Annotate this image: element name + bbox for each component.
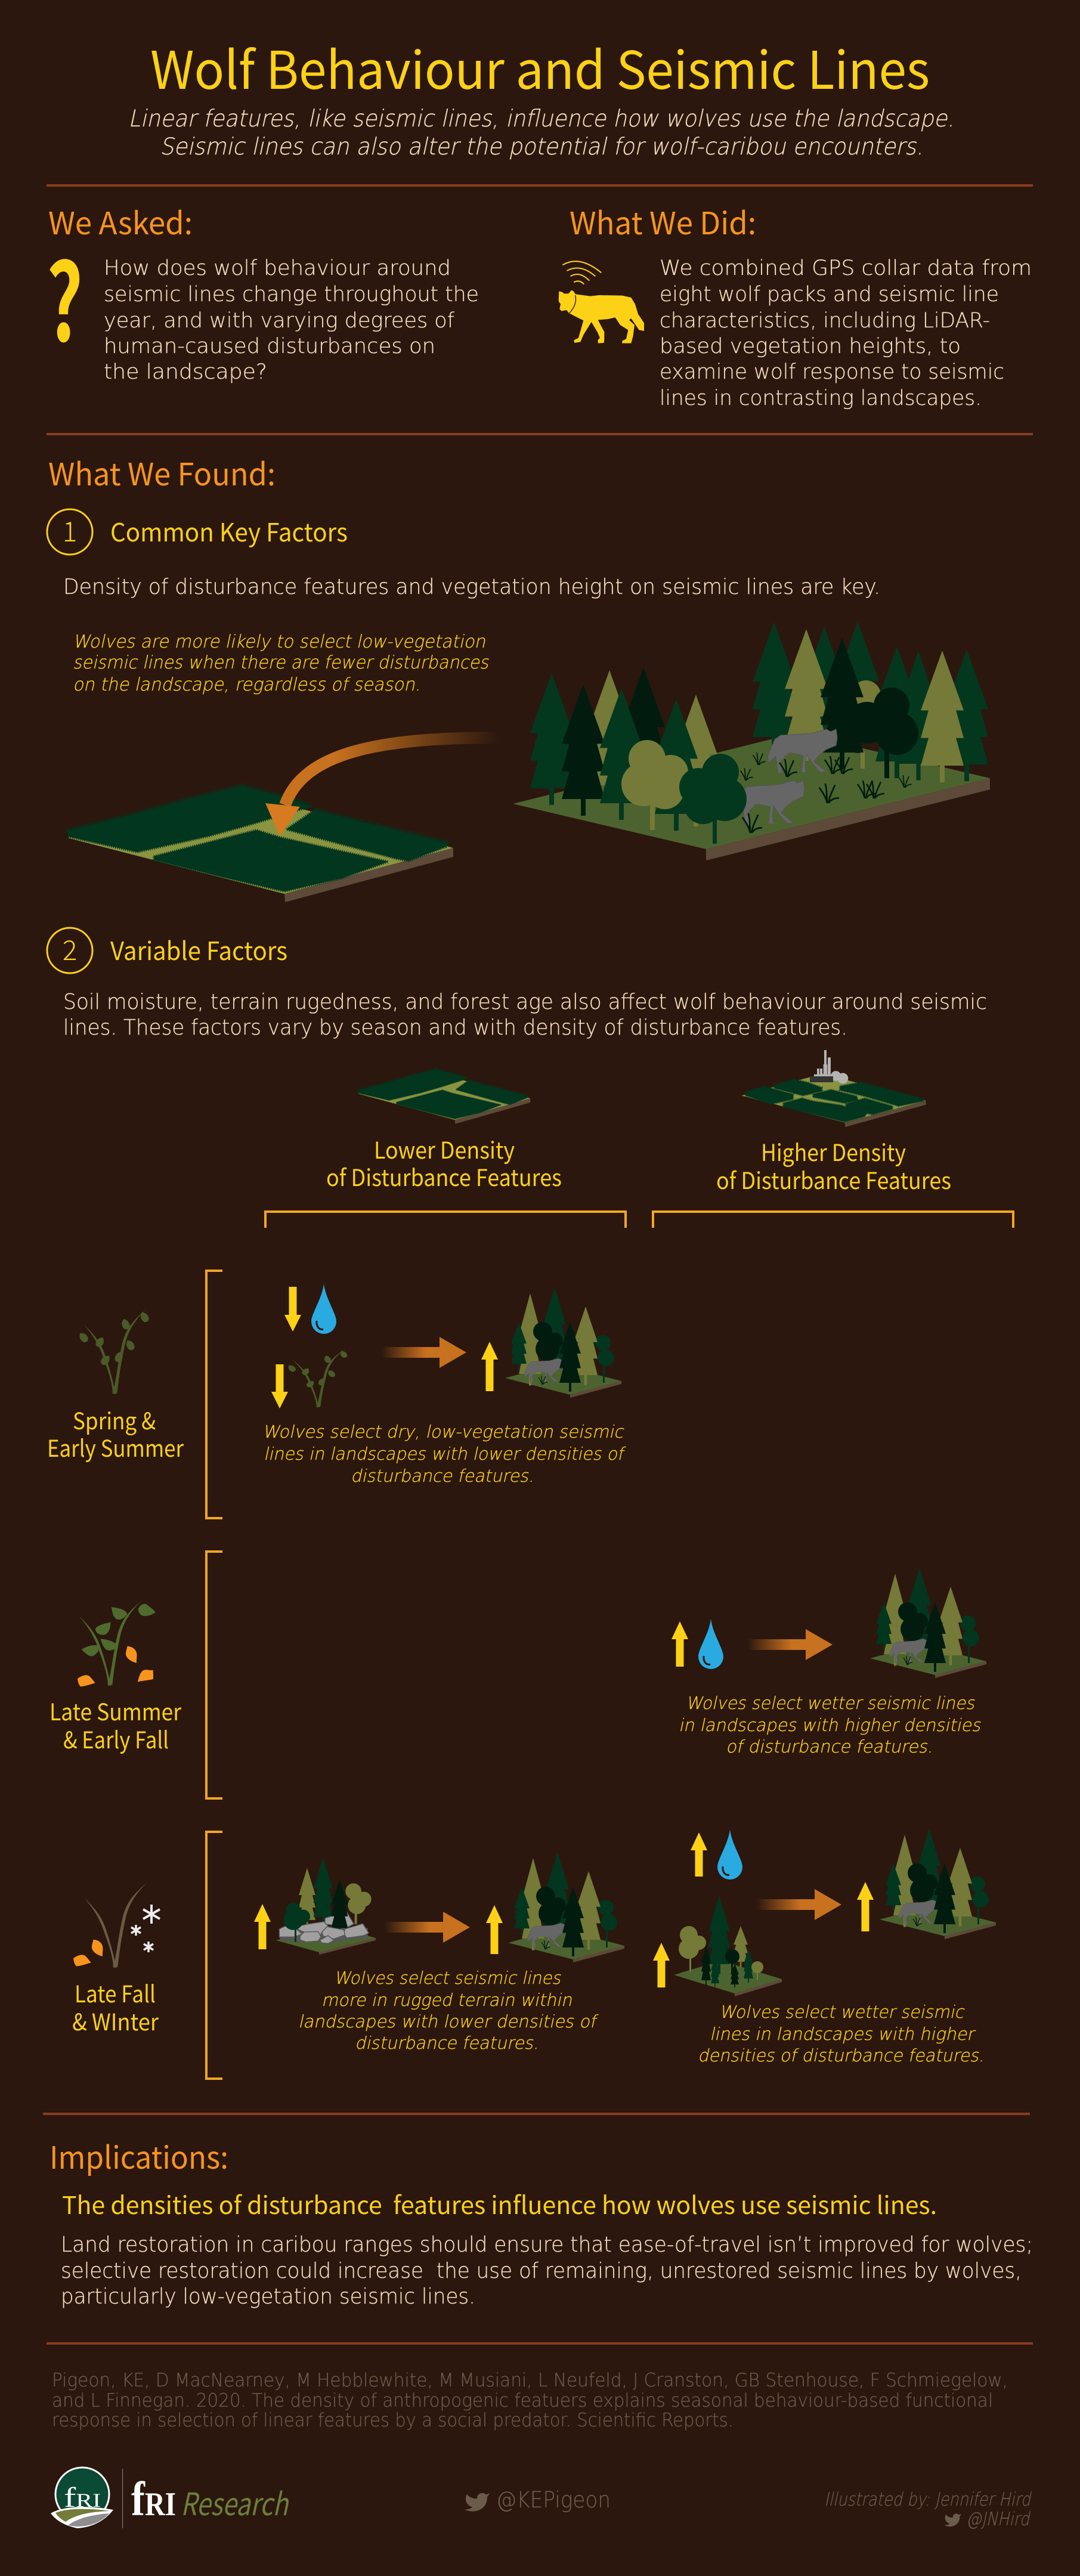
panel: we asked	[47, 199, 479, 384]
text: methods: We combined GPS collar data from	[660, 256, 1032, 280]
callout: low-vegetation selection: Wolves are more likely to select low-vegetation	[72, 631, 489, 652]
text: rugged terrain finding	[298, 1968, 599, 2053]
text: question: human-caused disturbances on	[104, 335, 435, 358]
text: spring finding: Wolves select dry, low-vegetation seismic	[262, 1422, 627, 1442]
icon: water drop	[698, 1619, 723, 1669]
text: rugged terrain finding: more in rugged terrain within	[321, 1990, 575, 2010]
illustration: mini forest	[880, 1829, 996, 1939]
arrow: orange result	[747, 1629, 833, 1660]
label: lower density	[326, 1132, 562, 1193]
subtitle: Linear features, like seismic lines, influence how wolves use the landscape.	[127, 105, 959, 132]
text: rugged terrain finding: disturbance features.	[354, 2033, 542, 2053]
arrow: up, selection	[486, 1905, 503, 1954]
credit: illustrator	[823, 2489, 1034, 2530]
callout: low-vegetation selection	[72, 631, 492, 695]
text: implications body: Land restoration in caribou ranges should ensure that ease-of-travel isn’t improved for wolves;	[61, 2233, 1033, 2257]
number badge 1	[47, 509, 92, 555]
arrow: curved orange	[265, 738, 499, 836]
panel: implications	[49, 2133, 1033, 2309]
arrow: up, young forest	[653, 1943, 670, 1987]
illustration: forest plot with wolves	[513, 621, 990, 860]
illustration: mini forest	[508, 1852, 624, 1962]
text: key statement: Density of disturbance features and vegetation height on seismic lines are key.	[63, 575, 880, 599]
text: spring finding	[262, 1422, 627, 1486]
label: lower density: Lower Density	[374, 1132, 515, 1166]
arrow: orange result	[385, 1912, 470, 1943]
icon: question mark: ?	[47, 219, 83, 372]
text: implications body: selective restoration could increase the use of remaining, unrestored seismic lines by wolves,	[61, 2259, 1022, 2283]
text: wetter lines finding: Wolves select wetter seismic	[719, 2002, 967, 2022]
text: rugged terrain finding: landscapes with lower densities of	[298, 2011, 599, 2032]
arrow: up, ruggedness	[254, 1904, 271, 1949]
text: late summer finding: in landscapes with higher densities	[678, 1715, 984, 1735]
label: late summer and early fall	[49, 1694, 182, 1755]
social: lead author twitter: @KEPigeon	[496, 2487, 611, 2513]
label: late summer and early fall: Late Summer	[49, 1694, 182, 1727]
wolf: back	[768, 729, 837, 773]
callout: low-vegetation selection: on the landscape, regardless of season.	[72, 674, 424, 695]
text: wetter lines finding: lines in landscapes with higher	[709, 2024, 978, 2044]
icon: spring plant	[77, 1308, 150, 1394]
logo: fRI Research	[51, 2467, 296, 2528]
text: implications body: particularly low-vegetation seismic lines.	[61, 2284, 475, 2309]
label: late fall and winter: Late Fall	[75, 1976, 156, 2010]
label: lower density: of Disturbance Features	[326, 1160, 562, 1193]
arrow: up, moisture	[691, 1832, 707, 1877]
heading: common key factors: Common Key Factors	[110, 513, 348, 549]
illustration: mini forest	[505, 1287, 621, 1398]
text: spring finding: lines in landscapes with lower densities of	[263, 1444, 627, 1464]
text: methods: eight wolf packs and seismic line	[660, 283, 999, 306]
text: rugged terrain finding: Wolves select seismic lines	[333, 1968, 564, 1988]
bracket: late fall	[206, 1832, 222, 2079]
text: spring finding: disturbance features.	[350, 1466, 537, 1486]
icon: winter plant with snowflakes	[73, 1881, 160, 1968]
label: late fall and winter: & WInter	[72, 2004, 159, 2038]
logo: fRI Research: fRI	[64, 2482, 101, 2513]
number badge 2	[47, 928, 92, 973]
illustration: mini forest	[870, 1568, 986, 1678]
label: spring and early summer: Early Summer	[47, 1431, 184, 1464]
label: higher density	[716, 1135, 951, 1196]
label: late fall and winter	[72, 1976, 159, 2038]
citation	[52, 2370, 1008, 2431]
icon: water drop	[311, 1284, 336, 1334]
icon: water drop	[717, 1829, 742, 1880]
text: variable factors description: Soil moisture, terrain rugedness, and forest age also affect wolf behaviour around seismic	[63, 990, 987, 1014]
panel: what we did	[559, 199, 1032, 410]
callout: low-vegetation selection: seismic lines when there are fewer disturbances	[72, 652, 492, 673]
text: late summer finding	[678, 1693, 984, 1757]
bracket: higher density column	[653, 1212, 1013, 1228]
text: variable factors description: lines. These factors vary by season and with density of disturbance features.	[63, 1015, 847, 1040]
text: wetter lines finding	[697, 2002, 988, 2066]
title: Wolf Behaviour and Seismic Lines	[150, 29, 930, 104]
bracket: late summer	[206, 1552, 222, 1798]
illustration: rugged terrain plot	[276, 1857, 376, 1955]
heading: what we found: What We Found:	[48, 450, 276, 494]
subtitle	[127, 105, 959, 160]
logo: fRI Research: Research	[179, 2480, 296, 2525]
text: methods	[660, 256, 1032, 410]
arrow: down, moisture	[284, 1287, 301, 1332]
text: methods: characteristics, including LiDAR-	[660, 309, 990, 333]
bracket: spring	[206, 1271, 222, 1518]
arrow: down, vegetation	[271, 1364, 288, 1408]
text: question: year, and with varying degrees of	[104, 309, 455, 333]
text: methods: based vegetation heights, to	[660, 335, 961, 358]
section: common key factors	[47, 509, 990, 902]
heading: what we did: What We Did:	[570, 199, 756, 243]
heading: variable factors: Variable Factors	[110, 931, 287, 968]
illustration: low-vegetation plot	[67, 786, 453, 902]
text: question: the landscape?	[104, 360, 267, 384]
wolf: front	[735, 781, 804, 825]
icon: late summer plant	[78, 1599, 156, 1686]
arrow: up, moisture	[671, 1621, 688, 1667]
row: spring and early summer	[47, 1271, 627, 1518]
arrow: orange result	[756, 1889, 841, 1920]
citation: response in selection of linear features by a social predator. Scientific Reports.	[52, 2410, 734, 2431]
text: methods: lines in contrasting landscapes.	[660, 386, 982, 410]
credit: illustrator: Illustrated by: Jennifer Hird	[823, 2489, 1034, 2510]
logo: fRI Research: fRI	[131, 2472, 176, 2526]
text: methods: examine wolf response to seismic	[660, 360, 1004, 384]
text: implications body	[61, 2233, 1033, 2309]
text: question: seismic lines change throughout the	[104, 283, 479, 306]
label: higher density: Higher Density	[761, 1135, 906, 1168]
citation: Pigeon, KE, D MacNearney, M Hebblewhite, M Musiani, L Neufeld, J Cranston, GB Stenhouse, F Schmiegelow,	[52, 2370, 1008, 2391]
row: late fall and winter	[72, 1829, 996, 2079]
text: question	[104, 256, 479, 384]
heading: we asked: We Asked:	[48, 199, 193, 243]
citation: and L Finnegan. 2020. The density of anthropogenic featuers explains seasonal behaviour-based functional	[52, 2390, 993, 2411]
arrow: orange result	[381, 1337, 466, 1368]
illustration: lower density plot	[358, 1069, 530, 1124]
label: late summer and early fall: & Early Fall	[63, 1722, 169, 1755]
label: spring and early summer	[47, 1403, 184, 1464]
text: late summer finding: of disturbance features.	[725, 1736, 936, 1757]
row: late summer and early fall	[49, 1552, 986, 1798]
arrow: up, selection	[481, 1342, 498, 1391]
number badge 1: 1	[63, 510, 77, 550]
text: variable factors description	[63, 990, 987, 1040]
bracket: lower density column	[265, 1212, 626, 1228]
heading: implications: Implications:	[49, 2133, 228, 2178]
text: late summer finding: Wolves select wetter seismic lines	[685, 1693, 978, 1713]
illustration: young forest plot	[674, 1896, 782, 1996]
illustration: higher density plot with facility	[741, 1050, 926, 1127]
arrow: up, selection	[857, 1882, 874, 1931]
label: higher density: of Disturbance Features	[716, 1163, 951, 1196]
icon: collared wolf with signal	[559, 261, 644, 343]
subtitle: Seismic lines can also alter the potential for wolf-caribou encounters.	[159, 133, 928, 160]
text: question: How does wolf behaviour around	[104, 256, 451, 280]
number badge 2: 2	[63, 929, 77, 968]
icon: small plant	[286, 1348, 348, 1407]
key message: The densities of disturbance features influence how wolves use seismic lines.	[62, 2185, 937, 2221]
text: wetter lines finding: densities of disturbance features.	[697, 2045, 988, 2066]
section: variable factors	[47, 928, 1013, 2079]
credit: illustrator: @JNHird	[965, 2509, 1033, 2530]
label: spring and early summer: Spring &	[73, 1403, 156, 1436]
